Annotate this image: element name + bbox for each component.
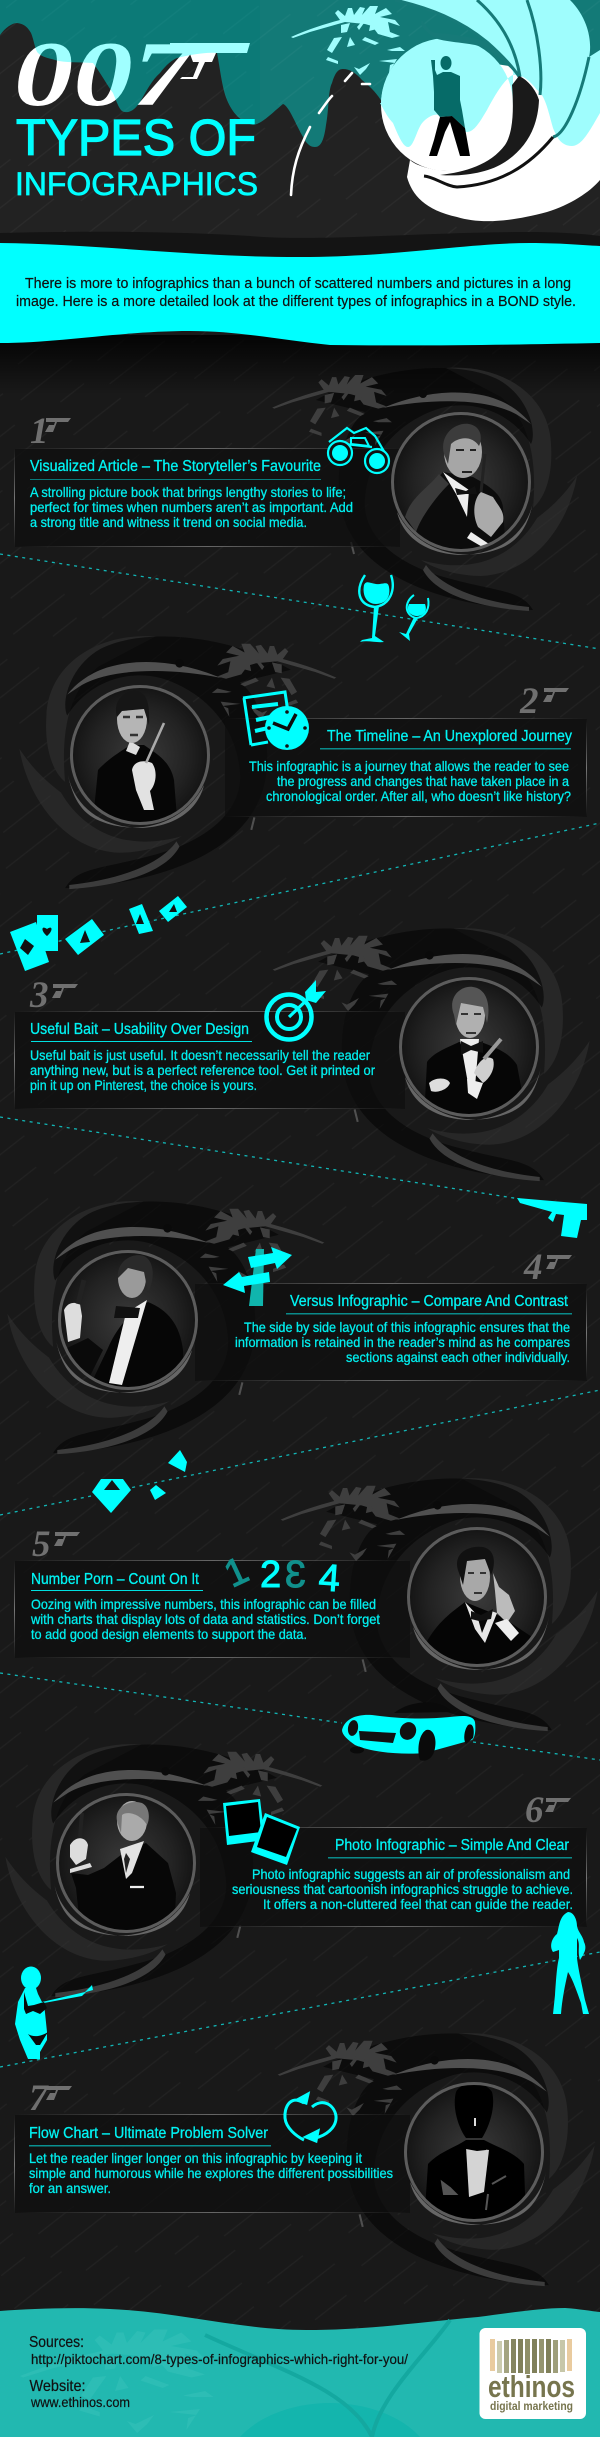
- body 2: chronological order. After all, who doesn’t like history?: [266, 788, 571, 804]
- intro text: There is more to infographics than a bunch of scattered numbers and pictures in a long: [25, 275, 571, 292]
- header gun barrel swirl artwork: [291, 0, 600, 221]
- swirl 4: [7, 1201, 324, 1454]
- body 6: It offers a non-cluttered feel that can guide the reader.: [263, 1896, 573, 1912]
- body 3: Useful bait is just useful. It doesn’t necessarily tell the reader: [30, 1047, 370, 1063]
- number 4: [523, 1247, 572, 1288]
- footer faint circle: [240, 2403, 420, 2437]
- icon: sports car: [342, 1702, 475, 1761]
- body 4: [235, 1319, 570, 1365]
- large diamond: [92, 1479, 131, 1513]
- body 6: [232, 1866, 573, 1912]
- number 2: 2: [519, 681, 538, 722]
- teal tint over 007: [0, 0, 260, 125]
- footer faint strokes: [205, 2320, 450, 2437]
- sources text: Sources:: [29, 2334, 84, 2351]
- teal swirl strokes: [395, 0, 589, 137]
- title 4: Versus Infographic – Compare And Contrast: [290, 1293, 568, 1310]
- body 4: information is retained in the reader’s mind as he compares: [235, 1334, 570, 1350]
- title 5: Number Porn – Count On It: [31, 1571, 199, 1588]
- portrait 2: [68, 686, 209, 830]
- light cyan circle: [380, 38, 513, 147]
- silhouette: woman standing: [551, 1912, 589, 2014]
- body 1: perfect for times when numbers aren’t as important. Add: [30, 499, 353, 515]
- icon: numbers 1234: [218, 1549, 341, 1600]
- header teal sky: [0, 0, 600, 250]
- sources text: www.ethinos.com: [30, 2394, 130, 2410]
- body 7: [29, 2150, 393, 2196]
- logo: ethinos: digital marketing: [490, 2399, 573, 2413]
- card: [37, 915, 58, 951]
- title: 007: 007: [14, 23, 197, 125]
- icon: playing cards: [10, 896, 187, 971]
- black swirl strokes: [440, 76, 539, 175]
- card: [129, 904, 153, 934]
- icon: numbers 1234: 1: [218, 1549, 255, 1596]
- number 1: 1: [30, 411, 48, 452]
- sources text: [29, 2334, 408, 2410]
- body 7: simple and humorous while he explores the different possibilities: [29, 2165, 393, 2181]
- sources text: Website:: [30, 2378, 86, 2395]
- feather leaves: [291, 6, 405, 75]
- swirl 2: [19, 636, 336, 889]
- dark wave behind intro band: [0, 232, 600, 265]
- sources text: http://piktochart.com/8-types-of-infographics-which-right-for-you/: [31, 2351, 408, 2367]
- panel: intro band: [0, 243, 600, 345]
- number 5: 5: [32, 1524, 50, 1565]
- dark fade under band: [0, 335, 600, 395]
- title 3: Useful Bait – Usability Over Design: [30, 1021, 249, 1038]
- body 3: [30, 1047, 375, 1093]
- body 5: Oozing with impressive numbers, this infographic can be filled: [31, 1596, 376, 1612]
- swirl 5: [281, 1478, 598, 1731]
- body 5: with charts that display lots of data and statistics. Don’t forget: [30, 1611, 380, 1627]
- icon: numbers 1234: 4: [317, 1557, 341, 1600]
- panel: photo infographic: [200, 1827, 587, 1927]
- body 3: anything new, but is a perfect reference tool. Get it printed or: [30, 1062, 375, 1078]
- body 3: pin it up on Pinterest, the choice is yours.: [30, 1077, 257, 1093]
- number 3: [29, 975, 78, 1016]
- panel: visualized article: [14, 448, 400, 547]
- body 7: for an answer.: [29, 2180, 111, 2196]
- title 1: Visualized Article – The Storyteller’s Favourite: [30, 458, 321, 475]
- small diamond: [150, 1485, 166, 1500]
- portrait 4: [56, 1251, 197, 1393]
- portrait 7: [405, 2083, 546, 2225]
- body 4: sections against each other individually.: [346, 1349, 570, 1365]
- title: types of: TYPES OF: [16, 109, 256, 166]
- number 1: [30, 411, 71, 452]
- icon: polaroid photos: [223, 1799, 300, 1865]
- number 3: 3: [29, 975, 48, 1016]
- panel: intro band: image. Here is a more detailed look at the different types of infographics in a BOND style.: [16, 293, 576, 310]
- logo wordmark: ethinos: [488, 2369, 575, 2404]
- body 5: to add good design elements to support the data.: [31, 1626, 307, 1642]
- body 1: [30, 484, 353, 530]
- card: [65, 919, 104, 955]
- portrait 6: [54, 1794, 195, 1936]
- title: infographics: INFOGRAPHICS: [15, 166, 258, 202]
- gun logo on 007: [170, 43, 250, 79]
- number 4: 4: [523, 1247, 542, 1288]
- swirl 3: [273, 928, 590, 1181]
- body 4: The side by side layout of this infographic ensures that the: [244, 1319, 570, 1335]
- card: [10, 922, 49, 971]
- title 7: Flow Chart – Ultimate Problem Solver: [29, 2125, 269, 2142]
- swirl 7: [278, 2033, 595, 2286]
- icon: binoculars: [328, 428, 389, 473]
- icon: numbers 1234: 3: [285, 1554, 306, 1596]
- body 1: A strolling picture book that brings lengthy stories to life;: [30, 484, 346, 500]
- icon: timeline document and clock: [243, 692, 309, 750]
- number 7: 7: [29, 2078, 49, 2119]
- light cyan swirl band: [395, 0, 600, 146]
- icon: signpost arrows: [223, 1247, 292, 1306]
- silhouette: woman with pistol: [15, 1966, 93, 2059]
- panel: number porn: [14, 1560, 410, 1658]
- diamond shard: [168, 1450, 187, 1472]
- body 6: seriousness that cartoonish infographics struggle to achieve.: [232, 1881, 573, 1897]
- title 2: The Timeline – An Unexplored Journey: [327, 728, 572, 745]
- number 2: [519, 681, 569, 722]
- body 1: a strong title and witness it trend on social media.: [30, 514, 307, 530]
- panel: the timeline: [225, 718, 587, 817]
- body 2: This infographic is a journey that allows the reader to see: [249, 758, 569, 774]
- body 6: Photo infographic suggests an air of professionalism and: [252, 1866, 570, 1882]
- number 6: [525, 1790, 571, 1831]
- portrait 5: [408, 1528, 549, 1670]
- icon: target with arrow: [266, 980, 326, 1040]
- number 6: 6: [525, 1790, 544, 1831]
- body 2: [249, 758, 571, 804]
- panel: versus infographic: [195, 1283, 587, 1381]
- body 7: Let the reader linger longer on this infographic by keeping it: [29, 2150, 362, 2166]
- panel: footer: [0, 2308, 600, 2437]
- icon: diamonds: [92, 1450, 187, 1513]
- body 5: [30, 1596, 380, 1642]
- logo bars: [490, 2339, 572, 2374]
- panel: flow chart: [14, 2114, 410, 2213]
- card: [159, 896, 187, 922]
- James Bond silhouette: [429, 56, 470, 156]
- header black mountain silhouette: [0, 23, 600, 262]
- icon: wine glasses: [359, 575, 428, 642]
- number 5: [32, 1524, 80, 1565]
- title 6: Photo Infographic – Simple And Clear: [335, 1837, 570, 1854]
- panel: useful bait: [14, 1011, 405, 1109]
- portrait 1: [392, 414, 533, 555]
- body 2: the progress and changes that have taken place in a: [277, 773, 569, 789]
- footer faint leaves: [20, 2330, 214, 2433]
- swirl 1: [272, 368, 577, 611]
- icon: heart-shaped flow arrows: [285, 2094, 336, 2141]
- logo: ethinos: [480, 2328, 586, 2419]
- small white shards: [291, 73, 370, 195]
- number 7: [29, 2078, 72, 2119]
- portrait 3: [400, 978, 541, 1120]
- white swirl: [407, 60, 600, 221]
- title group: [0, 0, 260, 202]
- icon: numbers 1234: 2: [260, 1554, 281, 1596]
- icon: pistol: [517, 1198, 587, 1238]
- swirl 6: [5, 1744, 322, 1997]
- dotted dividers: [0, 554, 600, 2067]
